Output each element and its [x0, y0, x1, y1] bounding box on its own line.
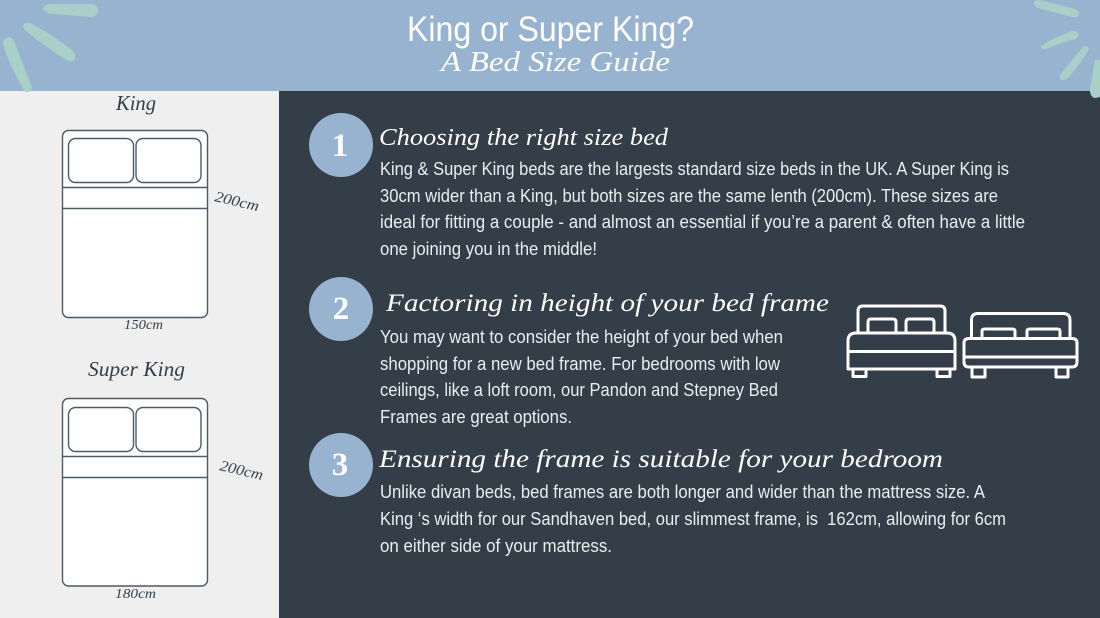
label: Super King length: 200cm [218, 458, 265, 484]
section 2: factoring in height of your bed frame [309, 277, 829, 427]
heading 1: Choosing the right size bed [379, 125, 669, 151]
number badge 1 [309, 113, 373, 177]
panel: header banner [0, 0, 1100, 98]
panel: left bed diagrams background [0, 91, 279, 618]
label: King width: 150cm [124, 318, 163, 333]
text block 3 [380, 481, 1006, 556]
text block 1: 30cm wider than a King, but both sizes are the same lenth (200cm). These sizes are [380, 185, 998, 206]
text block 1: King & Super King beds are the largests standard size beds in the UK. A Super King is [380, 158, 1009, 179]
diagram: King bed [62, 91, 261, 333]
text block 2: shopping for a new bed frame. For bedrooms with low [380, 353, 781, 374]
number badge 2 [309, 277, 373, 341]
bed outline [62, 398, 208, 586]
text block 3: King ‘s width for our Sandhaven bed, our slimmest frame, is 162cm, allowing for 6cm [380, 508, 1006, 529]
number badge 1: 1 [332, 128, 348, 164]
text block 2: ceilings, like a loft room, our Pandon and Stepney Bed [380, 379, 778, 400]
text block 1 [380, 158, 1025, 259]
heading: King: King [115, 91, 156, 115]
label: King length: 200cm [213, 189, 261, 215]
label: Super King width: 180cm [115, 587, 156, 602]
text block 1: one joining you in the middle! [380, 238, 597, 259]
decorative brush strokes: right [1034, 0, 1100, 98]
text block 3: on either side of your mattress. [380, 535, 612, 556]
text block 1: ideal for fitting a couple - and almost an essential if you’re a parent & often have a little [380, 211, 1025, 232]
diagram: Super King bed [62, 357, 265, 602]
number badge 3 [309, 433, 373, 497]
icon: low bed frame [964, 314, 1077, 377]
subtitle: A Bed Size Guide [439, 46, 670, 78]
section 1: choosing the right size bed [309, 113, 1025, 259]
text block 2 [380, 326, 783, 427]
section 3: ensuring the frame is suitable [309, 433, 1006, 556]
text block 2: You may want to consider the height of your bed when [380, 326, 783, 347]
text block 3: Unlike divan beds, bed frames are both longer and wider than the mattress size. A [380, 481, 986, 502]
heading: Super King: Super King [88, 357, 185, 381]
decorative brush strokes: left [3, 4, 98, 92]
bed outline [62, 130, 208, 318]
number badge 2: 2 [333, 291, 349, 327]
number badge 3: 3 [332, 447, 348, 483]
heading 3: Ensuring the frame is suitable for your bedroom [378, 446, 943, 473]
icon: tall bed frame [848, 306, 955, 376]
panel: dark content background [279, 91, 1100, 618]
text block 2: Frames are great options. [380, 406, 572, 427]
title: King or Super King? [407, 10, 694, 49]
heading 2: Factoring in height of your bed frame [385, 290, 829, 317]
